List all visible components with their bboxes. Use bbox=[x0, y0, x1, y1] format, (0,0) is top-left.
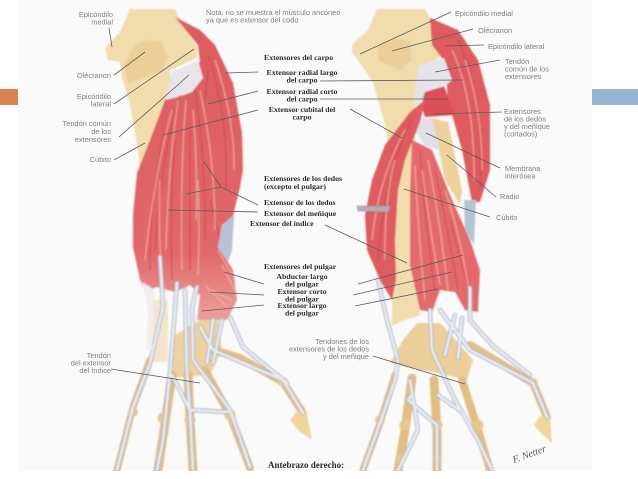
illustration: deep forearm, right figure bbox=[352, 9, 552, 470]
label: Extensor largo: del pulgar bbox=[285, 308, 320, 318]
label: Extensor radial largo: Extensor radial largo bbox=[267, 68, 337, 77]
icon: extensor carpi ulnaris muscle bbox=[365, 100, 425, 300]
icon: severed muscle stump bbox=[357, 206, 390, 212]
label: Extensores del pulgar: Extensores del pulgar bbox=[264, 262, 337, 271]
label: Tendón común, left: extensores bbox=[75, 135, 111, 144]
icon: radius bone bbox=[432, 118, 462, 205]
blue accent bar bbox=[592, 89, 638, 105]
label: Tendones de los extensores: extensores de los dedos bbox=[289, 344, 369, 354]
icon: common extensor tendon, right bbox=[414, 58, 452, 112]
label: Epicóndilo medial, right: Epicóndilo medial bbox=[455, 9, 513, 18]
label: Olécranon, right: Olécranon bbox=[478, 26, 512, 35]
note: ya que es extensor del codo bbox=[206, 16, 298, 24]
label: Tendón del extensor del índice: Tendón bbox=[87, 351, 111, 360]
label: Extensores de los dedos: (excepto el pulgar) bbox=[264, 182, 326, 191]
icon: tendons behind muscle bbox=[218, 215, 234, 262]
label: Tendón común, left: Tendón común bbox=[63, 119, 111, 128]
signature: F. Netter bbox=[510, 444, 548, 466]
icon: deep extensor muscles bbox=[410, 140, 480, 312]
illustration: posterior forearm, left figure bbox=[105, 9, 312, 470]
label: Olécranon, left: Olécranon bbox=[77, 71, 111, 80]
label: Extensor radial corto: del carpo bbox=[287, 94, 318, 104]
label: Epicóndilo medial, left: Epicóndilo bbox=[79, 10, 113, 19]
icon: common extensor tendon bbox=[165, 60, 203, 100]
label: Tendón común, right: extensores bbox=[505, 72, 541, 81]
label: Extensor corto: del pulgar bbox=[285, 294, 320, 304]
label: Cúbito, left: Cúbito bbox=[90, 155, 111, 164]
icon: left hand bones bbox=[117, 300, 312, 470]
label: Epicóndilo lateral, left: Epicóndilo bbox=[77, 92, 111, 101]
label: Extensor de los dedos: Extensor de los dedos bbox=[264, 198, 336, 207]
icon: humerus and ulna bone bbox=[105, 9, 198, 175]
label: Tendón del extensor del índice: del índice bbox=[79, 366, 111, 375]
label: Abductor largo: Abductor largo bbox=[276, 272, 328, 281]
finger joints, right bbox=[363, 378, 538, 462]
label: Extensor largo: Extensor largo bbox=[277, 301, 327, 310]
label: Membrana interósea: interósea bbox=[505, 172, 536, 180]
label: Radio: Radio bbox=[500, 192, 519, 201]
icon: olecranon detail, right bbox=[378, 39, 412, 70]
label: Extensor radial corto: Extensor radial corto bbox=[267, 87, 337, 96]
label: Epicóndilo medial, left: medial bbox=[91, 18, 113, 26]
label: Extensor radial largo: del carpo bbox=[287, 76, 318, 84]
label: Extensores cortados: (cortados) bbox=[504, 130, 537, 138]
leader lines, right figure bbox=[320, 12, 502, 384]
icon: left hand tendons bbox=[117, 257, 303, 470]
label: Membrana interósea: Membrana bbox=[505, 164, 540, 173]
label: Extensor del índice: Extensor del índice bbox=[250, 219, 314, 228]
orange accent bar bbox=[0, 89, 18, 105]
caption: Antebrazo derecho: bbox=[268, 460, 344, 470]
label: Extensor corto: Extensor corto bbox=[277, 287, 327, 296]
muscle striations bbox=[145, 55, 235, 310]
label: Epicóndilo lateral, right: Epicóndilo lateral bbox=[488, 42, 545, 51]
label: Extensores cortados: y del meñique bbox=[504, 122, 550, 131]
label: Tendón común, right: Tendón bbox=[505, 57, 529, 66]
leader lines, left figure bbox=[109, 28, 264, 383]
label: Abductor largo: del pulgar bbox=[285, 280, 320, 288]
icon: olecranon detail bbox=[124, 40, 168, 84]
label: Tendones de los extensores: y del meñique bbox=[323, 352, 369, 361]
label: Extensor cubital: Extensor cubital del bbox=[269, 105, 335, 114]
label: Extensores cortados: Extensores bbox=[504, 107, 541, 116]
label: Tendón del extensor del índice: del extensor bbox=[71, 358, 112, 368]
label: Tendones de los extensores: Tendones de los bbox=[315, 337, 369, 346]
label: Epicóndilo lateral, left: lateral bbox=[91, 100, 111, 108]
icon: extensor carpi radialis muscles bbox=[430, 18, 490, 202]
label: Extensores de los dedos: Extensores de los dedos bbox=[264, 174, 342, 183]
label: Tendón común, right: común de los bbox=[505, 64, 549, 74]
label: Extensores del carpo: Extensores del carpo bbox=[264, 53, 333, 62]
muscle striations, right bbox=[372, 40, 482, 300]
finger joints bbox=[117, 377, 288, 462]
note: Nota: no se muestra el músculo ancóneo bbox=[206, 8, 340, 17]
label: Extensores cortados: de los dedos bbox=[504, 114, 546, 124]
icon: right hand tendons bbox=[363, 200, 547, 470]
label: Cúbito, right: Cúbito bbox=[496, 213, 517, 222]
label: Tendón común, left: de los bbox=[91, 127, 111, 136]
icon: humerus and ulna bone, right bbox=[352, 9, 447, 326]
icon: cut extensor muscles bbox=[422, 86, 455, 117]
label: Extensor del meñique: Extensor del meñique bbox=[264, 209, 337, 218]
icon: interosseous membrane bbox=[416, 118, 440, 150]
label: Extensor cubital: carpo bbox=[292, 112, 312, 122]
icon: right hand bones bbox=[363, 323, 552, 470]
icon: extensor muscle mass bbox=[133, 17, 243, 320]
